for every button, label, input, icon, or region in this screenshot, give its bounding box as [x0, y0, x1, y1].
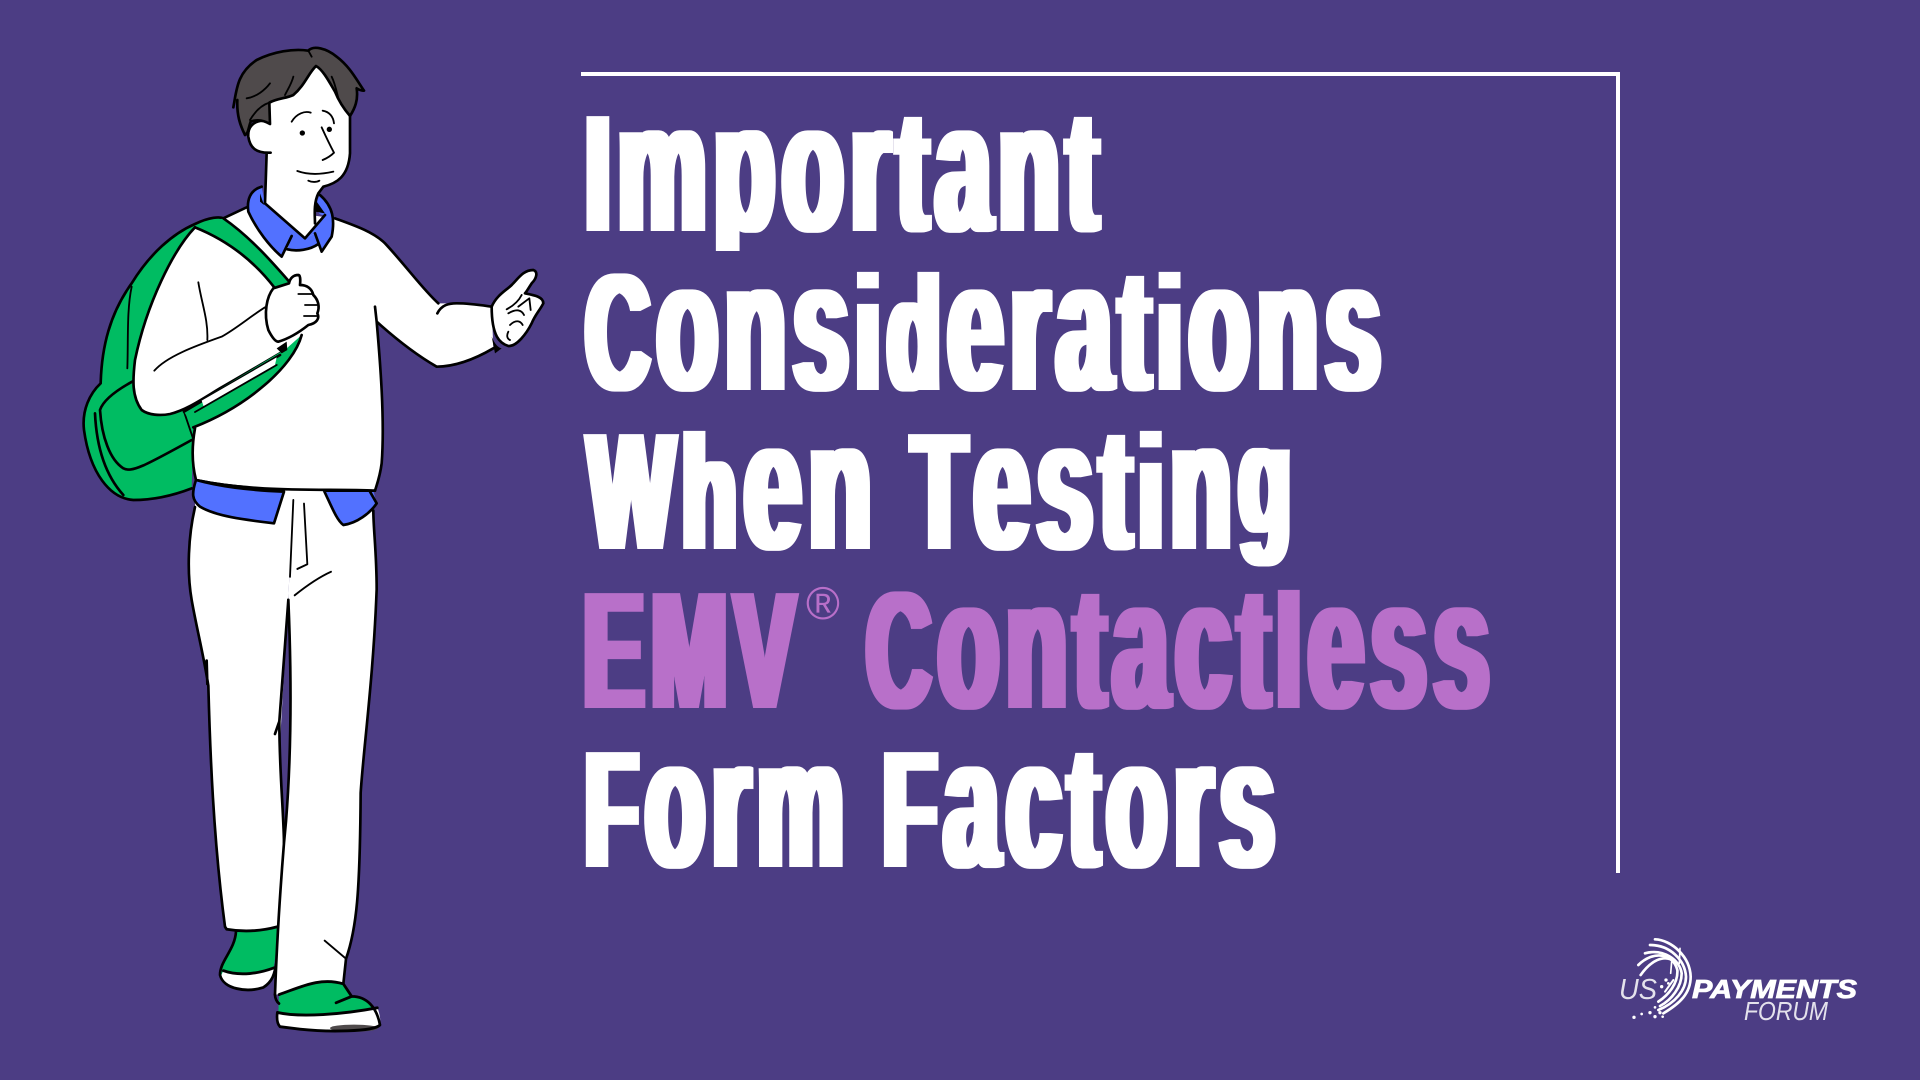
face details: eyes, nose, mouth — [292, 111, 334, 182]
title line: When Testing: Testin — [912, 380, 1299, 589]
gap lower line — [195, 365, 277, 412]
waist fill — [195, 486, 373, 511]
white gap between straps — [202, 357, 277, 407]
hair — [233, 48, 364, 135]
face outline — [248, 115, 350, 223]
shirt tail outlines — [193, 480, 377, 525]
shirt tail left — [193, 480, 284, 523]
trouser creases — [290, 500, 345, 958]
title line: When Testing — [588, 380, 1298, 589]
figure upper body — [84, 48, 543, 500]
shirt tail right — [324, 491, 377, 525]
hair strands — [247, 51, 338, 120]
right trouser outline — [275, 511, 377, 995]
registered mark: ® — [806, 577, 840, 629]
illustration: student with backpack — [84, 48, 543, 1032]
icon: blue collar — [248, 187, 333, 257]
sleeve cuff — [277, 342, 287, 353]
title line: EMV Contactless — [584, 539, 1496, 748]
left arm — [133, 227, 287, 415]
hair outline — [233, 48, 364, 135]
arm crease lines — [154, 282, 265, 371]
frame: top and right border lines — [581, 74, 1618, 873]
left trouser leg — [189, 500, 293, 931]
title line: Form Factors: Form — [585, 698, 851, 907]
logo: US Payments Forum — [1619, 939, 1858, 1026]
title line: Form Factors: Factors — [883, 698, 1282, 907]
strap outline — [195, 218, 291, 288]
title line: When Testing: When — [588, 380, 879, 589]
logo text: US: US — [1619, 974, 1658, 1006]
sweater body — [193, 207, 493, 491]
lower strap outline — [184, 335, 302, 427]
shirt tails — [193, 480, 377, 525]
icon: logo globe arcs — [1632, 939, 1691, 1019]
title line: Considerations: Considerations — [586, 221, 1388, 430]
figure lower body — [189, 486, 380, 1032]
shoulder strap — [195, 218, 291, 288]
title — [583, 116, 1490, 869]
right shoe — [275, 982, 380, 1032]
logo text: PAYMENTS: PAYMENTS — [1692, 974, 1858, 1004]
lower strap — [184, 335, 302, 427]
left trouser outline — [189, 507, 288, 931]
title line: Important: Important — [586, 62, 1106, 271]
icon: green backpack — [84, 217, 302, 500]
icon: gripping hand — [266, 275, 319, 342]
left shoe — [220, 927, 277, 990]
title line: Form Factors — [585, 698, 1282, 907]
backpack outline — [84, 217, 302, 500]
icon: pointing hand — [492, 270, 543, 353]
logo text: FORUM: FORUM — [1744, 996, 1828, 1026]
head and neck — [248, 65, 350, 238]
title line: When Testing: g — [1239, 391, 1298, 567]
right trouser leg — [275, 500, 377, 995]
title line: EMV Contactless: Contactless — [866, 539, 1496, 748]
left arm outline — [133, 227, 280, 415]
sweater outline — [193, 207, 493, 491]
title line: EMV Contactless: EMV — [584, 558, 802, 744]
